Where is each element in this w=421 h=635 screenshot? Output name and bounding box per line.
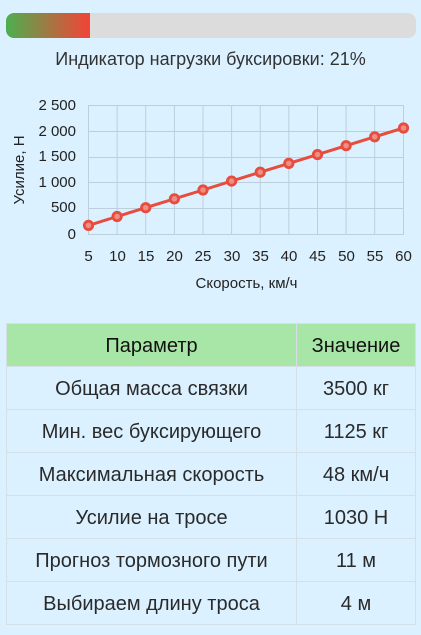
progress bar fill [6,13,90,38]
x axis ticks: 5 [84,248,93,265]
y axis ticks: 2 000 [38,123,76,140]
parameters table: Значение [312,334,400,356]
parameters table: 1125 кг [324,420,388,442]
x axis ticks: 30 [224,248,240,265]
y axis ticks: 2 500 [38,97,76,114]
x axis ticks [84,248,412,265]
parameters table: Общая масса связки [55,378,248,400]
parameters table [6,323,416,625]
force line series [84,124,408,230]
parameters table: 3500 кг [323,378,389,400]
parameters table: Усилие на тросе [75,506,228,528]
x axis ticks: 20 [166,248,183,265]
y axis ticks [38,97,76,243]
y axis ticks: 500 [51,199,76,216]
parameters table: 4 м [341,592,371,614]
x axis ticks: 50 [338,248,355,265]
parameters table: Мин. вес буксирующего [42,420,261,442]
parameters table: 48 км/ч [323,464,389,486]
y axis ticks: 1 000 [38,174,76,191]
parameters table: 1030 Н [324,506,388,528]
load indicator label: Индикатор нагрузки буксировки: 21% [55,49,366,69]
parameters table: Прогноз тормозного пути [35,550,268,572]
y axis ticks: 0 [68,226,76,243]
x axis ticks: 45 [309,248,326,265]
parameters table: Параметр [105,334,198,356]
x axis title: Скорость, км/ч [196,275,297,292]
line chart [11,97,412,292]
x axis ticks: 55 [367,248,383,265]
x axis ticks: 10 [109,248,126,265]
parameters table: Максимальная скорость [39,464,264,486]
parameters table: 11 м [336,550,376,572]
progress bar [6,13,416,38]
x axis ticks: 35 [252,248,269,265]
y axis title: Усилие, Н [11,135,28,205]
y axis ticks: 1 500 [38,148,76,165]
x axis ticks: 25 [195,248,211,265]
x axis ticks: 40 [281,248,297,265]
x axis ticks: 15 [138,248,154,265]
x axis ticks: 60 [395,248,412,265]
parameters table: Выбираем длину троса [43,592,260,614]
